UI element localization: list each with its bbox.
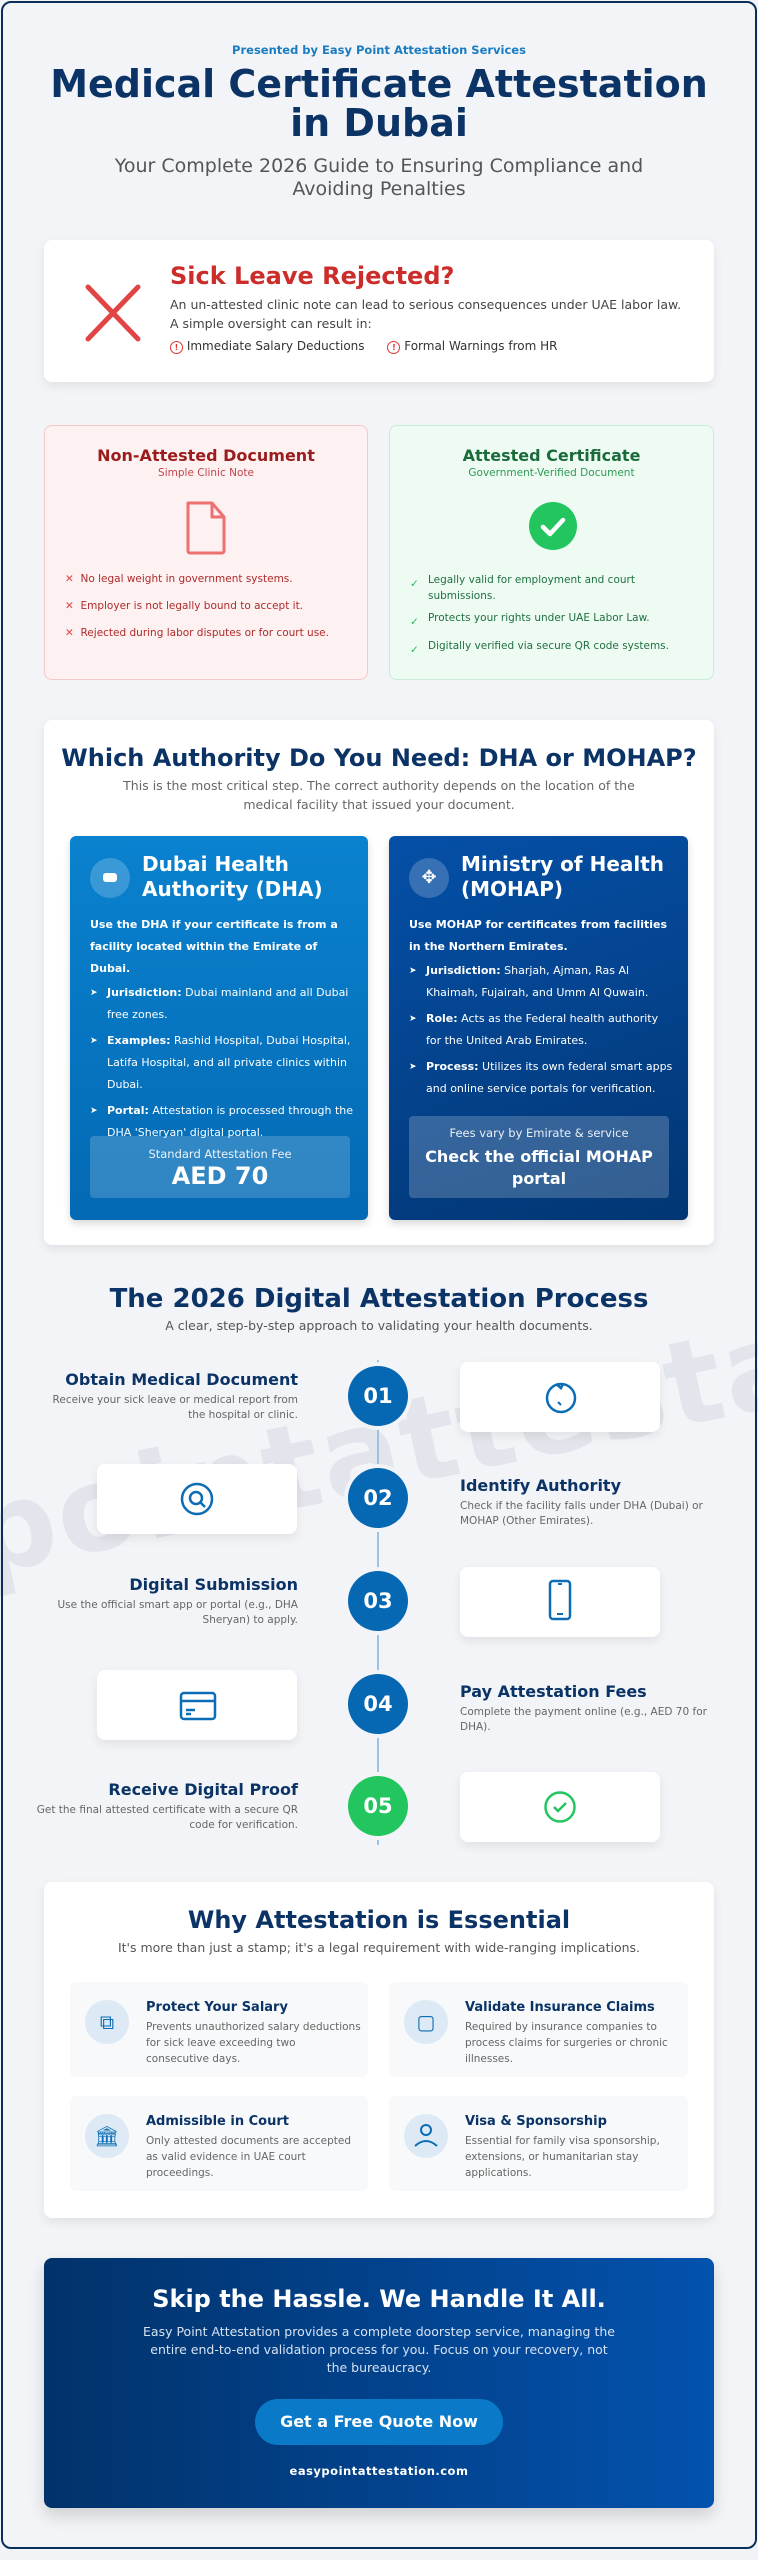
panel: MOHAP: Process: Utilizes its own federal smart apps and online service portals for verification. xyxy=(426,1060,672,1095)
panel: MOHAP xyxy=(389,836,688,1220)
fee box xyxy=(90,1136,350,1198)
intro: This is the most critical step. The correct authority depends on the location of the xyxy=(123,778,635,793)
panel: non-attested: Non-Attested Document xyxy=(97,446,315,465)
panel: DHA: Portal: Attestation is processed through the DHA 'Sheryan' digital portal. xyxy=(107,1104,353,1139)
panel: why attestation xyxy=(44,1882,714,2218)
item: insurance: Required by insurance companies to process claims for surgeries or chronic illnesses. xyxy=(465,2021,668,2065)
list: Protects your rights under UAE Labor Law. xyxy=(428,612,650,624)
panel: non-attested xyxy=(44,425,368,680)
heading: process: The 2026 Digital Attestation Process xyxy=(110,1284,648,1314)
title: Medical Certificate Attestation xyxy=(50,62,708,106)
item: court: Only attested documents are accepted as valid evidence in UAE court proceedings. xyxy=(146,2135,351,2179)
panel: attested: Government-Verified Document xyxy=(468,467,635,479)
item: visa xyxy=(389,2096,688,2191)
panel: MOHAP: Role: Acts as the Federal health authority for the United Arab Emirates. xyxy=(426,1012,658,1047)
step 1: Receive your sick leave or medical report from the hospital or clinic. xyxy=(53,1394,298,1421)
panel: DHA: Examples: Rashid Hospital, Dubai Hospital, Latifa Hospital, and all private clinics within Dubai. xyxy=(107,1034,350,1091)
item: salary: Prevents unauthorized salary deductions for sick leave exceeding two consecutive days. xyxy=(146,2021,361,2065)
step 1: 01 xyxy=(363,1384,393,1408)
item: visa: Essential for family visa sponsorship, extensions, or humanitarian stay applications. xyxy=(465,2135,660,2179)
panel: MOHAP: (MOHAP) xyxy=(461,877,563,901)
panel: CTA: easypointattestation.com xyxy=(290,2464,468,2478)
consequences: Immediate Salary Deductions Formal Warnings from HR xyxy=(187,339,557,353)
icon: document xyxy=(186,502,226,554)
item: insurance: Validate Insurance Claims xyxy=(465,2000,655,2015)
item: court: Admissible in Court xyxy=(146,2114,289,2129)
step 5: Receive Digital Proof xyxy=(108,1780,298,1799)
panel: sick leave rejected xyxy=(44,240,714,382)
panel: attested: Attested Certificate xyxy=(463,446,640,465)
panel: DHA: ➤ xyxy=(90,1106,98,1116)
subtitle xyxy=(114,155,643,200)
step 1: Obtain Medical Document xyxy=(65,1370,298,1389)
panel: MOHAP: Jurisdiction: Sharjah, Ajman, Ras Al Khaimah, Fujairah, and Umm Al Quwain. xyxy=(426,964,648,999)
title xyxy=(50,62,708,145)
step 4: Pay Attestation Fees xyxy=(460,1682,647,1701)
subtitle: Avoiding Penalties xyxy=(292,178,466,200)
panel: CTA: entire end-to-end validation process for you. Focus on your recovery, not xyxy=(150,2342,608,2357)
intro xyxy=(123,778,635,812)
step 1 xyxy=(53,1362,660,1436)
panel: non-attested: Simple Clinic Note xyxy=(158,467,254,479)
list: ✕ Employer is not legally bound to accept it. xyxy=(65,600,303,612)
list: ✓ xyxy=(410,616,419,628)
text xyxy=(170,297,681,331)
fee box: portal xyxy=(512,1169,566,1188)
text: An un-attested clinic note can lead to serious consequences under UAE labor law. xyxy=(170,297,681,312)
list: Digitally verified via secure QR code systems. xyxy=(428,640,669,652)
icon: handshake xyxy=(409,858,449,898)
title: in Dubai xyxy=(290,101,468,145)
step 2 xyxy=(96,1464,703,1538)
list: Legally valid for employment and court xyxy=(428,574,635,586)
item: court: 🏛 xyxy=(94,2124,120,2148)
panel: MOHAP: ➤ xyxy=(409,1014,417,1024)
item: court xyxy=(70,2096,368,2191)
fee box: AED 70 xyxy=(172,1162,268,1190)
list xyxy=(65,573,329,639)
list: ✕ No legal weight in government systems. xyxy=(65,573,293,585)
text: A simple oversight can result in: xyxy=(170,316,372,331)
item: salary xyxy=(70,1982,368,2077)
icon: chat xyxy=(90,858,130,898)
item: insurance: ▢ xyxy=(417,2010,435,2034)
presented by: Presented by Easy Point Attestation Services xyxy=(232,43,526,57)
step 2: Identify Authority xyxy=(460,1476,621,1495)
panel: DHA xyxy=(70,836,368,1220)
icon: red X xyxy=(86,284,140,342)
list xyxy=(410,574,669,656)
step 2: Check if the facility falls under DHA (Dubai) or MOHAP (Other Emirates). xyxy=(460,1500,703,1527)
fee box: Check the official MOHAP xyxy=(425,1147,653,1166)
consequences: ! xyxy=(175,343,178,352)
list: ✕ Rejected during labor disputes or for court use. xyxy=(65,627,329,639)
step 3: Use the official smart app or portal (e.g., DHA Sheryan) to apply. xyxy=(57,1599,298,1626)
step 3 xyxy=(57,1567,660,1642)
panel: CTA: Easy Point Attestation provides a complete doorstep service, managing the xyxy=(143,2324,615,2339)
subtitle: process: A clear, step-by-step approach to validating your health documents. xyxy=(165,1318,593,1333)
intro: medical facility that issued your document. xyxy=(243,797,515,812)
panel: MOHAP: Ministry of Health xyxy=(461,852,664,876)
header xyxy=(50,43,708,200)
subtitle: Your Complete 2026 Guide to Ensuring Compliance and xyxy=(115,155,643,177)
step 5 xyxy=(37,1772,660,1846)
step 5: Get the final attested certificate with a secure QR code for verification. xyxy=(37,1804,298,1831)
icon: handshake: ✥ xyxy=(421,867,437,888)
panel: MOHAP: Use MOHAP for certificates from facilities in the Northern Emirates. xyxy=(409,918,667,953)
panel: why attestation: Why Attestation is Essential xyxy=(188,1906,570,1934)
panel: DHA: ➤ xyxy=(90,1036,98,1046)
step 4: Complete the payment online (e.g., AED 70 for DHA). xyxy=(460,1706,707,1733)
step 3: 03 xyxy=(363,1589,393,1613)
step 5: 05 xyxy=(363,1794,393,1818)
panel: CTA: the bureaucracy. xyxy=(327,2360,431,2375)
list: ✓ xyxy=(410,644,419,656)
timeline xyxy=(37,1360,707,1846)
item: visa: Visa & Sponsorship xyxy=(465,2114,607,2129)
heading: Sick Leave Rejected? xyxy=(170,262,454,290)
button xyxy=(255,2399,503,2445)
panel: MOHAP: ➤ xyxy=(409,966,417,976)
fee box: Standard Attestation Fee xyxy=(148,1147,292,1161)
item: salary: ⧉ xyxy=(100,2010,114,2034)
list: submissions. xyxy=(428,590,496,602)
panel: DHA: Jurisdiction: Dubai mainland and all Dubai free zones. xyxy=(107,986,348,1021)
button: Get a Free Quote Now xyxy=(280,2412,478,2431)
panel: DHA: Authority (DHA) xyxy=(142,877,323,901)
panel: DHA: Dubai Health xyxy=(142,852,289,876)
panel: CTA xyxy=(44,2258,714,2508)
fee box: Fees vary by Emirate & service xyxy=(449,1126,629,1140)
icon: check circle xyxy=(529,502,577,550)
list: ✓ xyxy=(410,578,419,590)
panel: CTA: Skip the Hassle. We Handle It All. xyxy=(152,2285,606,2313)
step 4 xyxy=(96,1670,707,1744)
item: insurance xyxy=(389,1982,688,2077)
heading: Which Authority Do You Need: DHA or MOHAP? xyxy=(61,744,697,772)
panel: DHA: Use the DHA if your certificate is from a facility located within the Emirate of Dubai. xyxy=(90,918,338,975)
fee box xyxy=(409,1116,669,1198)
panel: DHA: ➤ xyxy=(90,988,98,998)
step 3: Digital Submission xyxy=(129,1575,298,1594)
panel: MOHAP: ➤ xyxy=(409,1062,417,1072)
step 4: 04 xyxy=(363,1692,393,1716)
panel: attested xyxy=(389,425,714,680)
step 2: 02 xyxy=(363,1486,393,1510)
panel: why attestation: It's more than just a stamp; it's a legal requirement with wide-ranging implications. xyxy=(118,1940,640,1955)
consequences: ! xyxy=(392,343,396,352)
panel: which authority xyxy=(44,720,714,1245)
item: salary: Protect Your Salary xyxy=(146,2000,288,2015)
